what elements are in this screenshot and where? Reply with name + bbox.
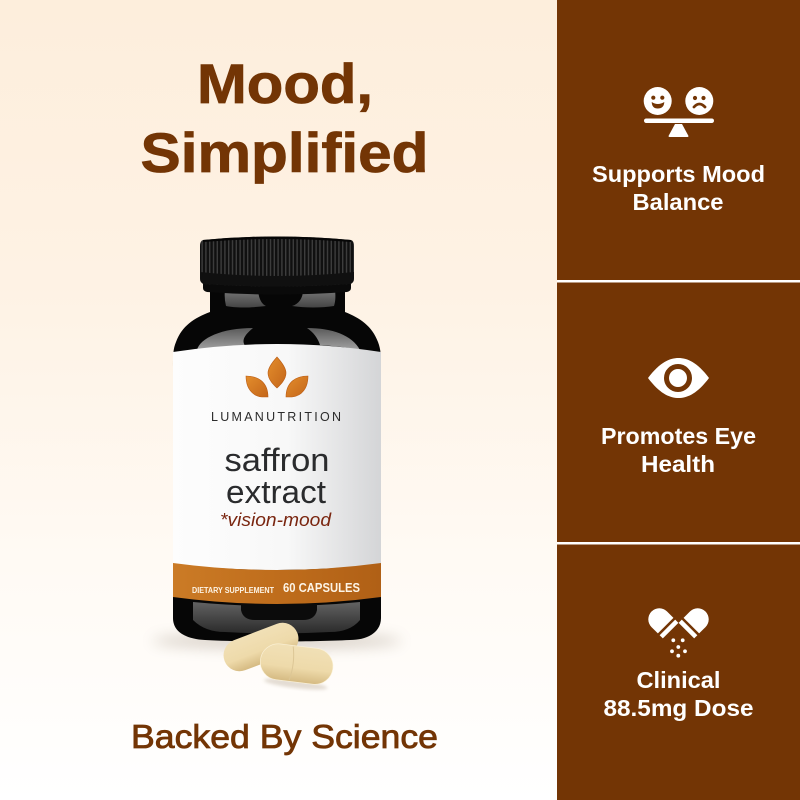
neck reflections: [225, 290, 266, 308]
title: [140, 52, 428, 184]
icon: open capsule with powder: [644, 604, 713, 658]
benefit text: Supports Mood: [592, 161, 765, 187]
brand name: LUMANUTRITION: [211, 410, 341, 424]
footer tagline: Backed By Science: [131, 719, 438, 756]
left background panel: [0, 0, 557, 800]
product name: [224, 442, 330, 510]
bottle body: [173, 286, 381, 642]
cap collar: [203, 278, 351, 294]
product subtitle: *vision-mood: [220, 510, 332, 530]
panel: benefits column: [557, 0, 800, 800]
benefit text: Promotes Eye: [601, 423, 756, 449]
benefit text: Clinical: [636, 667, 720, 693]
divider two: [557, 542, 800, 544]
title: Mood,: [197, 52, 373, 115]
benefit text: [592, 161, 765, 215]
benefit text: [601, 423, 756, 477]
band text: [192, 581, 360, 595]
product name: saffron: [224, 442, 330, 478]
capsule back: [219, 618, 303, 676]
capsule front: [257, 642, 335, 692]
band text: DIETARY SUPPLEMENT: [192, 585, 275, 595]
benefit text: [604, 667, 754, 721]
divider one: [557, 280, 800, 282]
shoulder reflections: [197, 328, 253, 350]
brand logo leaves: [246, 357, 308, 397]
benefit text: Health: [641, 451, 715, 477]
bottom reflection: [193, 602, 360, 634]
icon: eye: [648, 358, 709, 398]
product name: extract: [226, 474, 326, 510]
benefit: clinical dose: [604, 604, 754, 721]
white label: [173, 344, 381, 570]
title: Simplified: [140, 121, 428, 184]
benefit: mood balance: [592, 87, 765, 215]
benefit text: Balance: [632, 189, 724, 215]
bottle shadow: [152, 633, 402, 649]
capsules: [219, 618, 335, 692]
benefit: eye health: [601, 358, 756, 477]
product bottle: [152, 236, 402, 649]
bottle cap: [200, 236, 354, 286]
orange band: [173, 563, 381, 604]
band text: 60 CAPSULES: [283, 581, 360, 595]
icon: balance scale with faces: [644, 87, 714, 137]
benefit text: 88.5mg Dose: [604, 695, 754, 721]
